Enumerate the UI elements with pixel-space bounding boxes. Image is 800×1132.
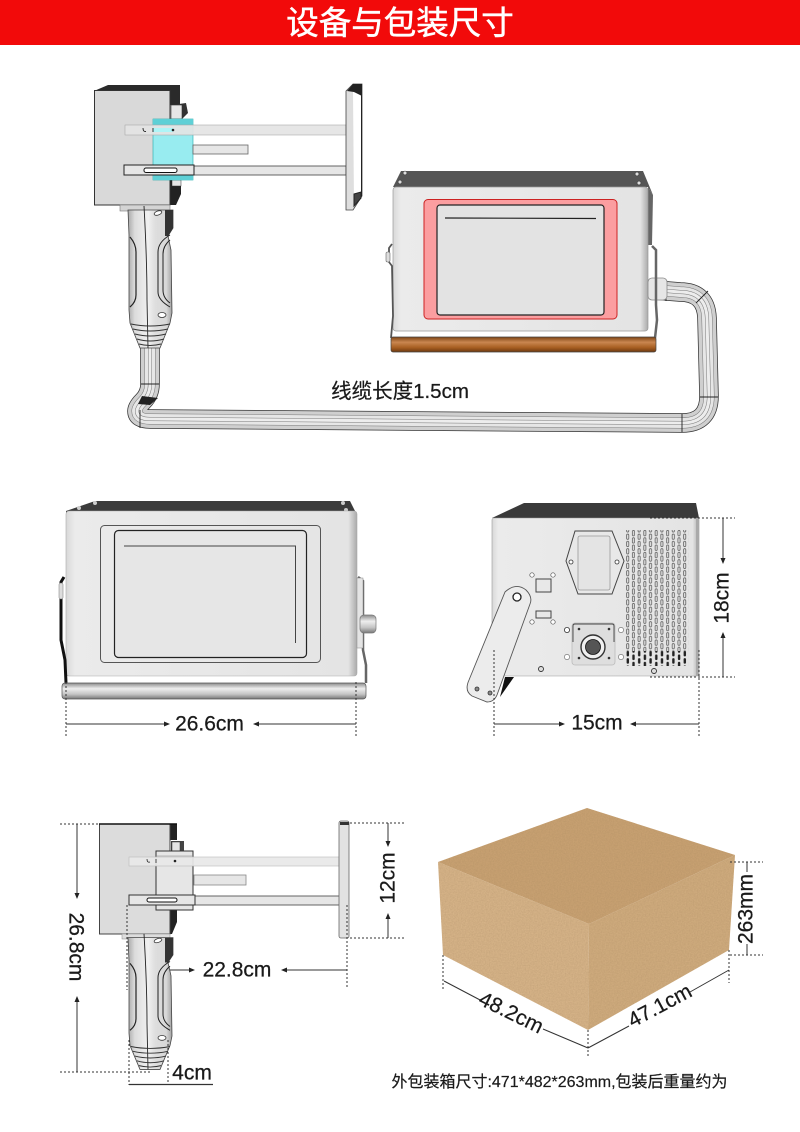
copper handle [391, 337, 656, 352]
panel outlines [100, 526, 320, 662]
device: scanner side view with dimensions [99, 821, 349, 1069]
dimension: 15cm [494, 650, 699, 736]
cyan plate [153, 119, 193, 180]
dimension: 26.6cm [66, 682, 356, 736]
title: 设备与包装尺寸 [286, 5, 514, 41]
small ports [530, 573, 555, 624]
mounting plate [339, 821, 349, 938]
grip handle [128, 206, 173, 348]
knob [360, 615, 376, 633]
mounting plate [346, 84, 362, 210]
dimension: 4cm [129, 1040, 213, 1085]
dimension: 47.1cm [588, 950, 729, 1048]
device: front view with width dimension [59, 501, 376, 699]
vent slots [626, 530, 689, 666]
title banner [0, 0, 800, 45]
dimension: 48.2cm [443, 955, 588, 1056]
middle bar [194, 875, 246, 885]
dimension: 4cm: 4cm [172, 1062, 212, 1084]
front bar [129, 895, 340, 905]
front bar [124, 165, 346, 175]
dimension: 48.2cm: 48.2cm [475, 988, 547, 1038]
device: top side view with scanner [94, 84, 362, 348]
dimension: 12cm: 12cm [376, 852, 400, 904]
dimension: 18cm [650, 518, 735, 677]
dimension: 47.1cm: 47.1cm [624, 980, 696, 1032]
dimension: 22.8cm: 22.8cm [203, 958, 271, 982]
packaging caption: 外包装箱尺寸:471*482*263mm,包装后重量约为 [391, 1073, 728, 1091]
rear bar [125, 125, 346, 135]
dimension: 263mm: 263mm [734, 874, 758, 944]
device: front view with red panel [386, 171, 667, 352]
handle arm [467, 586, 531, 702]
right bracket [652, 246, 657, 338]
dimension: 26.8cm: 26.8cm [64, 913, 88, 981]
power socket plate [566, 531, 624, 594]
centre plate [156, 851, 193, 910]
dimension: 18cm: 18cm [710, 572, 734, 624]
device: rear view [467, 503, 699, 702]
red panel [424, 200, 617, 319]
dimension: 26.6cm: 26.6cm [175, 712, 244, 736]
cable connector [564, 623, 624, 665]
rear bar [129, 857, 340, 866]
cable gland [648, 278, 667, 300]
dimension: 15cm: 15cm [571, 712, 623, 734]
housing box [94, 90, 170, 205]
middle bar [193, 145, 248, 154]
left bracket [389, 244, 393, 338]
cable [137, 283, 718, 432]
cardboard box [438, 808, 735, 1030]
handle bar [62, 683, 366, 699]
side brackets [61, 577, 66, 683]
grip handle [128, 934, 173, 1069]
dimension: 22.8cm [127, 905, 347, 990]
cable length label: 线缆长度1.5cm [331, 380, 469, 403]
dimension: 12cm [350, 823, 405, 938]
dimension: 263mm [730, 862, 763, 955]
dimension: 26.8cm [60, 824, 150, 1072]
